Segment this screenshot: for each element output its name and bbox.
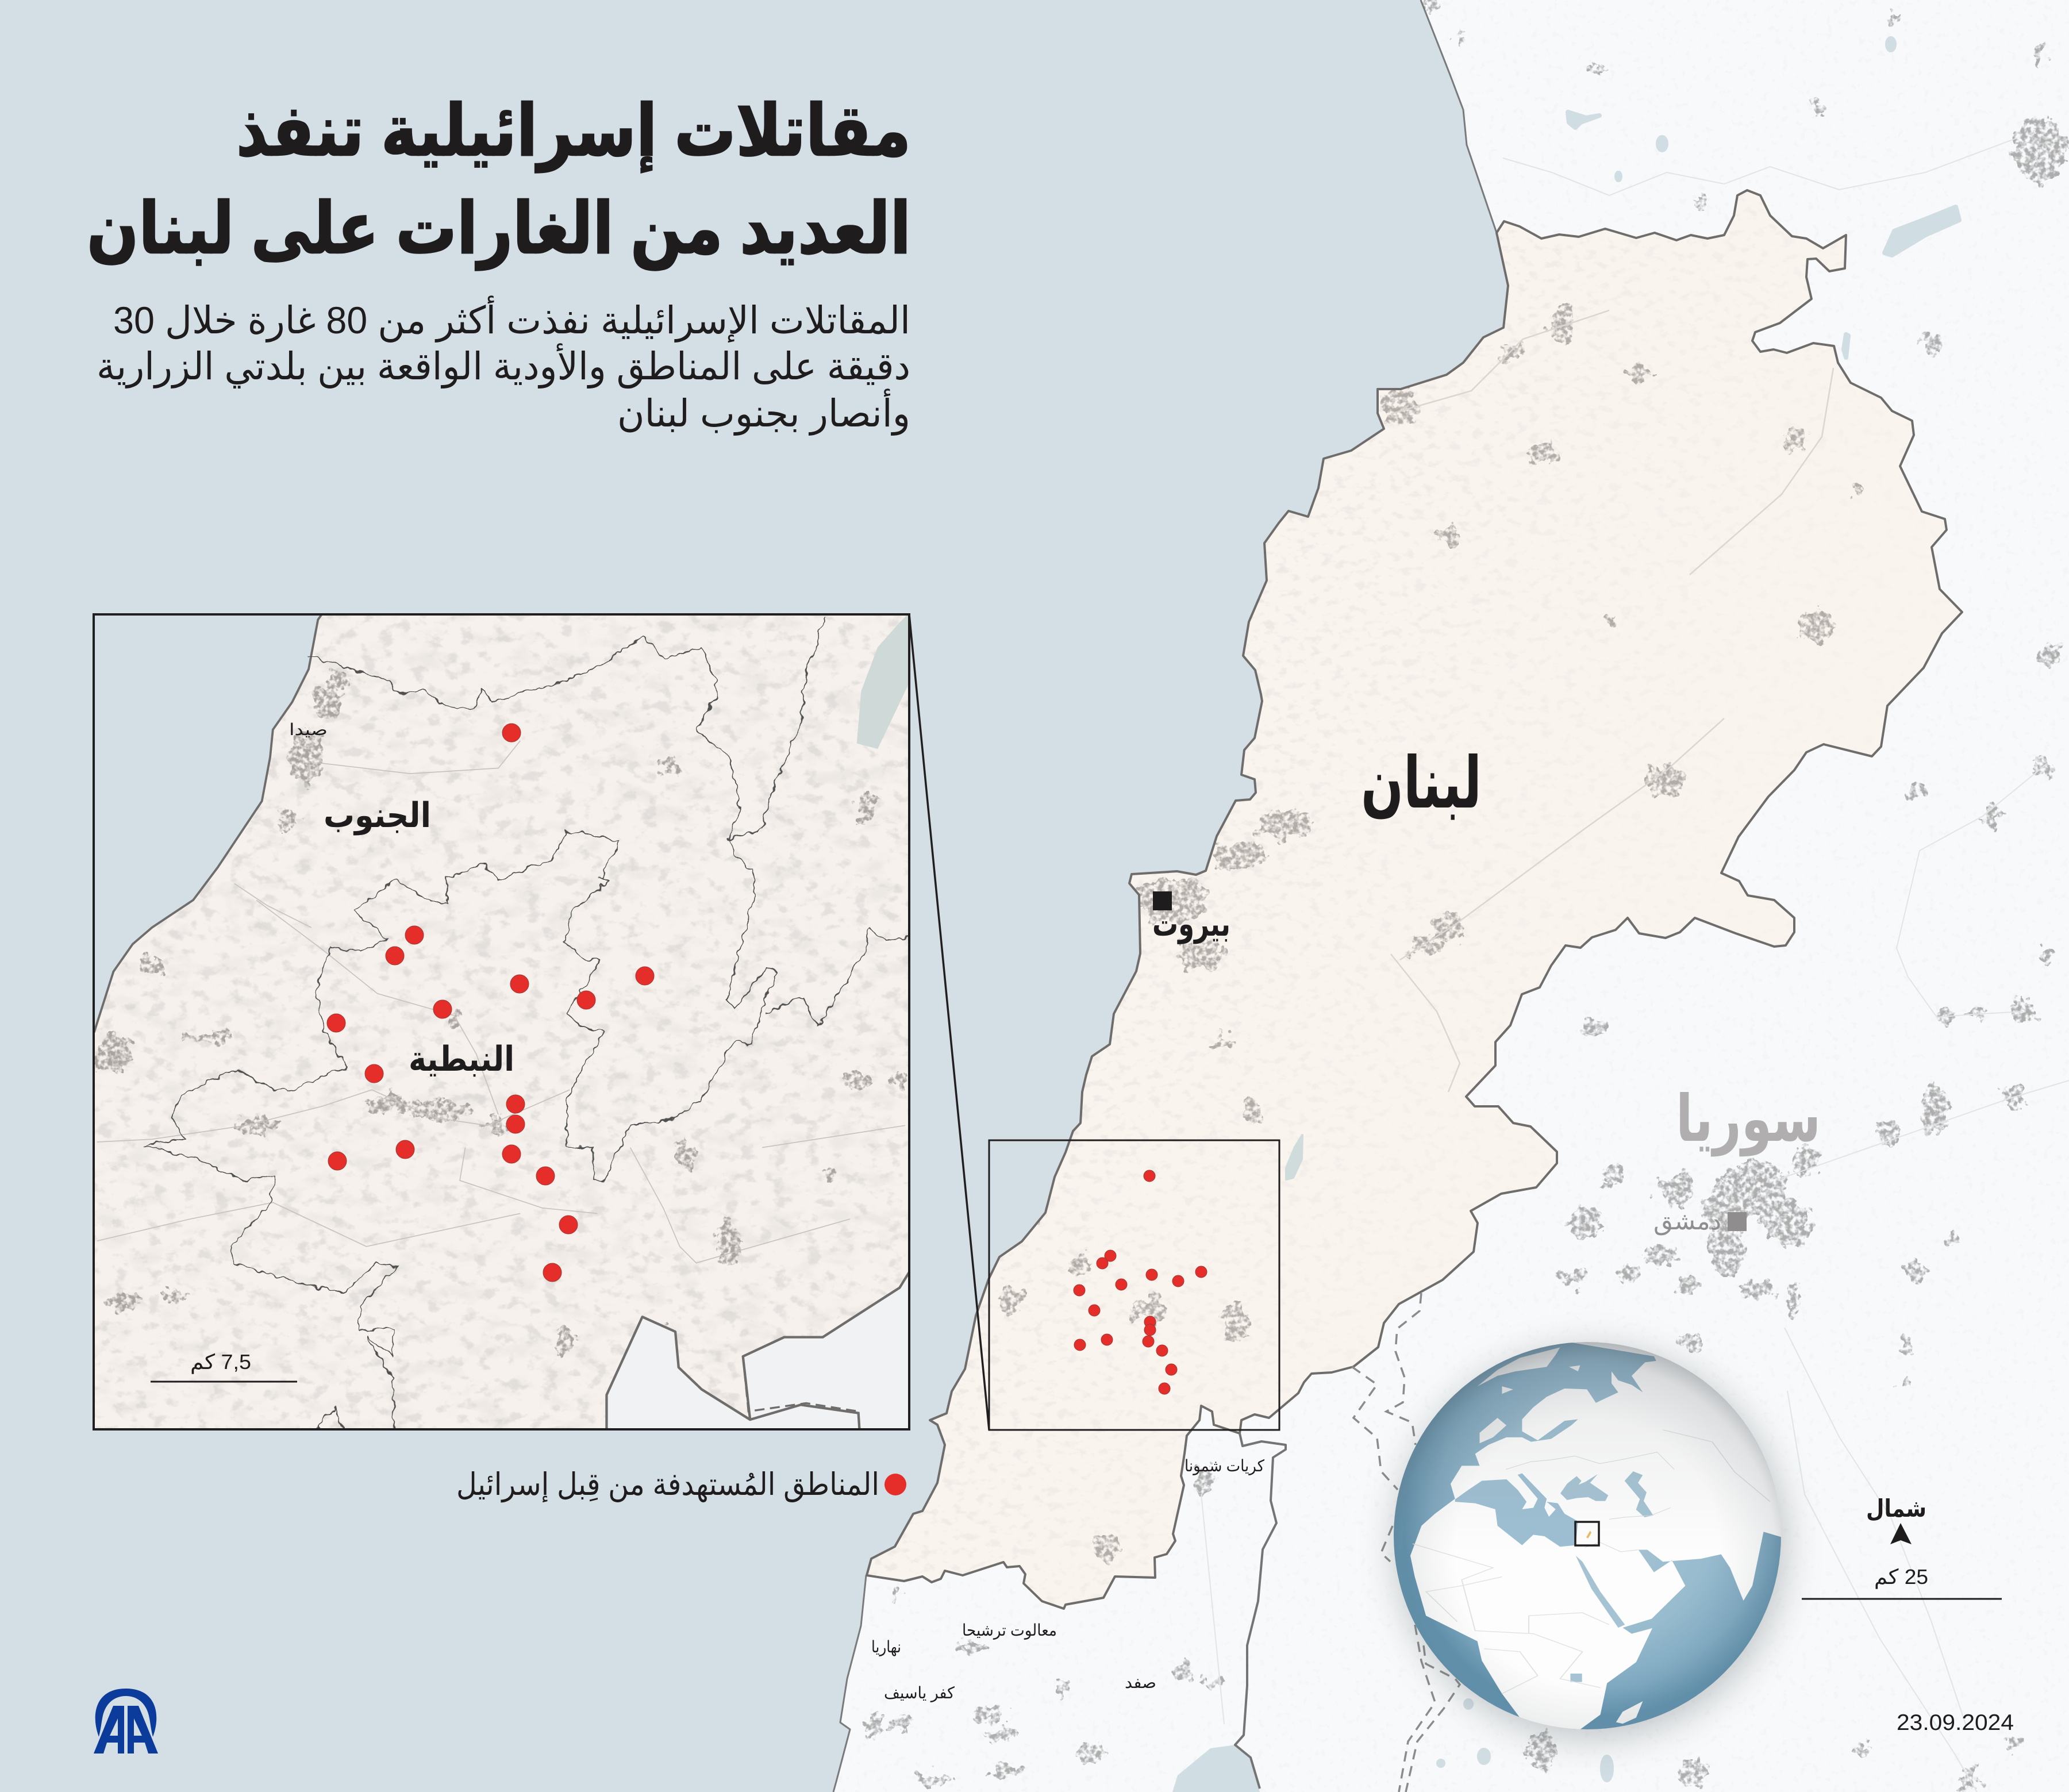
label: Kafr Yasif: كفر ياسيف (884, 1684, 955, 1702)
subtitle text block: دقيقة على المناطق والأودية الواقعة بين بلدتي الزرارية (97, 343, 910, 389)
subtitle text block (97, 295, 910, 436)
marker: Beirut (1153, 891, 1172, 910)
inset label: Nabatieh: النبطية (409, 1040, 514, 1078)
neighbouring land texture (805, 0, 2069, 1792)
title (87, 91, 911, 271)
north arrow (1866, 1495, 1926, 1544)
label: Kiryat Shmona: كريات شمونا (1185, 1457, 1265, 1475)
locator strike markers (1074, 1170, 1207, 1394)
globe locator box (1575, 1522, 1599, 1545)
inset terrain texture (94, 614, 909, 1429)
inset strike markers (327, 724, 654, 1282)
label: Lebanon: لبنان (1361, 744, 1482, 823)
border: Israel and Golan (1235, 1433, 1286, 1789)
inset scale bar: 7,5 كم (190, 1350, 251, 1374)
lake: Qaraoun (1286, 1135, 1302, 1179)
globe oceans (1368, 1340, 1784, 1733)
inset land (94, 614, 909, 1429)
globe rim shading (1394, 1342, 1781, 1729)
globe borders: Eurasia (1506, 1452, 1674, 1552)
inset dashed lines (743, 1356, 859, 1412)
locator globe (1368, 1340, 1784, 1733)
country: Lebanon (867, 190, 1962, 1609)
inset label: South: الجنوب (324, 796, 431, 836)
roads outside Lebanon (1201, 138, 2069, 1792)
country border: Lebanon outline (867, 190, 1962, 1609)
globe land base (1394, 1342, 1781, 1729)
dashed demarcation lines (1352, 1293, 1460, 1792)
inset speckle texture (94, 614, 909, 1429)
globe top shading (1394, 1342, 1781, 1729)
date: 23.09.2024 (1897, 1710, 2014, 1735)
coast lines outside Lebanon (833, 0, 1497, 1792)
inset roads (97, 741, 905, 1263)
label: Damascus: دمشق (1653, 1208, 1721, 1235)
lakes (1439, 39, 1959, 1780)
globe shadow (1397, 1349, 1785, 1738)
logo: Anadolu Agency (94, 1689, 158, 1753)
globe Red Sea (1576, 1556, 1625, 1628)
inset frame (94, 614, 909, 1429)
Lebanon terrain and urban texture (875, 230, 1864, 1574)
inset district boundaries (144, 617, 910, 1439)
title: مقاتلات إسرائيلية تنفذ (236, 91, 911, 173)
globe borders: Africa and Asia (1413, 1430, 1770, 1694)
label: Maalot Tarshiha: معالوت ترشيحا (962, 1621, 1057, 1640)
marker: Damascus (1728, 1212, 1747, 1231)
label: Safed: صفد (1125, 1674, 1156, 1691)
globe Lake Victoria (1570, 1674, 1582, 1682)
locator box (989, 1140, 1279, 1430)
sea (0, 0, 1517, 1792)
title: العديد من الغارات على لبنان (87, 189, 911, 271)
label: Beirut: بيروت (1152, 905, 1230, 944)
globe islands (1478, 1347, 1643, 1724)
inset lake (857, 609, 922, 749)
inset urban areas (96, 672, 907, 1355)
inset sea (80, 598, 333, 1048)
urban areas outside Lebanon (864, 0, 2068, 1792)
inset label: Sidon: صيدا (289, 721, 328, 739)
legend: المناطق المُستهدفة من قِبل إسرائيل (456, 1467, 879, 1503)
connector line from inset to locator box (909, 614, 989, 1430)
subtitle text block: وأنصار بجنوب لبنان (617, 389, 910, 436)
globe Mediterranean (1455, 1473, 1578, 1547)
globe Lebanon (1586, 1530, 1591, 1539)
inset neighbouring territory (606, 1252, 922, 1439)
lake: Sea of Galilee (1172, 1745, 1260, 1792)
label: Nahariya: نهاريا (871, 1638, 901, 1656)
panel: inset map (80, 598, 922, 1439)
subtitle text block: المقاتلات الإسرائيلية نفذت أكثر من 80 غارة خلال 30 (113, 295, 910, 343)
main scale bar: 25 كم (1874, 1565, 1928, 1589)
label: Syria: سوريا (1676, 1083, 1821, 1156)
globe inland seas (1560, 1471, 1653, 1517)
north arrow: شمال (1866, 1495, 1926, 1522)
